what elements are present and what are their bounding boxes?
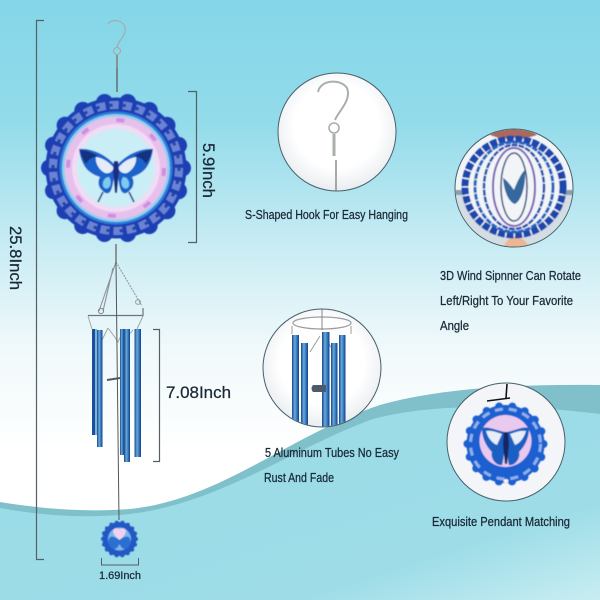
caption: 3D spinner	[440, 268, 581, 333]
caption: tubes	[264, 445, 399, 485]
label: 1.69Inch: 1.69Inch	[99, 570, 141, 582]
product: wind chime	[88, 244, 143, 520]
wave: dark band	[0, 385, 600, 600]
caption: hook: S-Shaped Hook For Easy Hanging	[245, 207, 408, 222]
caption: 3D spinner: Left/Right To Your Favorite	[440, 293, 573, 308]
callout circle: pendant	[447, 383, 565, 501]
wave: teal area	[0, 407, 600, 600]
callout circle: hook	[278, 73, 396, 192]
dimension: total height	[36, 20, 44, 560]
label: 25.8Inch: 25.8Inch	[6, 226, 25, 290]
label: 7.08Inch: 7.08Inch	[166, 383, 231, 402]
dimension: tube length	[153, 330, 160, 462]
product: hook	[108, 21, 125, 92]
callout circle: 3D spinner	[455, 128, 573, 250]
dimension: spinner height	[188, 92, 196, 242]
caption: tubes: Rust And Fade	[264, 470, 334, 485]
product: small pendant	[102, 522, 136, 556]
caption: tubes: 5 Aluminum Tubes No Easy	[265, 445, 399, 460]
dimension: pendant width	[102, 558, 138, 565]
label: 5.9Inch: 5.9Inch	[199, 143, 218, 198]
callout circle: tubes	[263, 309, 381, 429]
caption: 3D spinner: Angle	[440, 318, 469, 333]
butterfly	[79, 149, 153, 202]
product: large spinner disc	[46, 98, 186, 238]
caption: pendant: Exquisite Pendant Matching	[432, 514, 570, 529]
